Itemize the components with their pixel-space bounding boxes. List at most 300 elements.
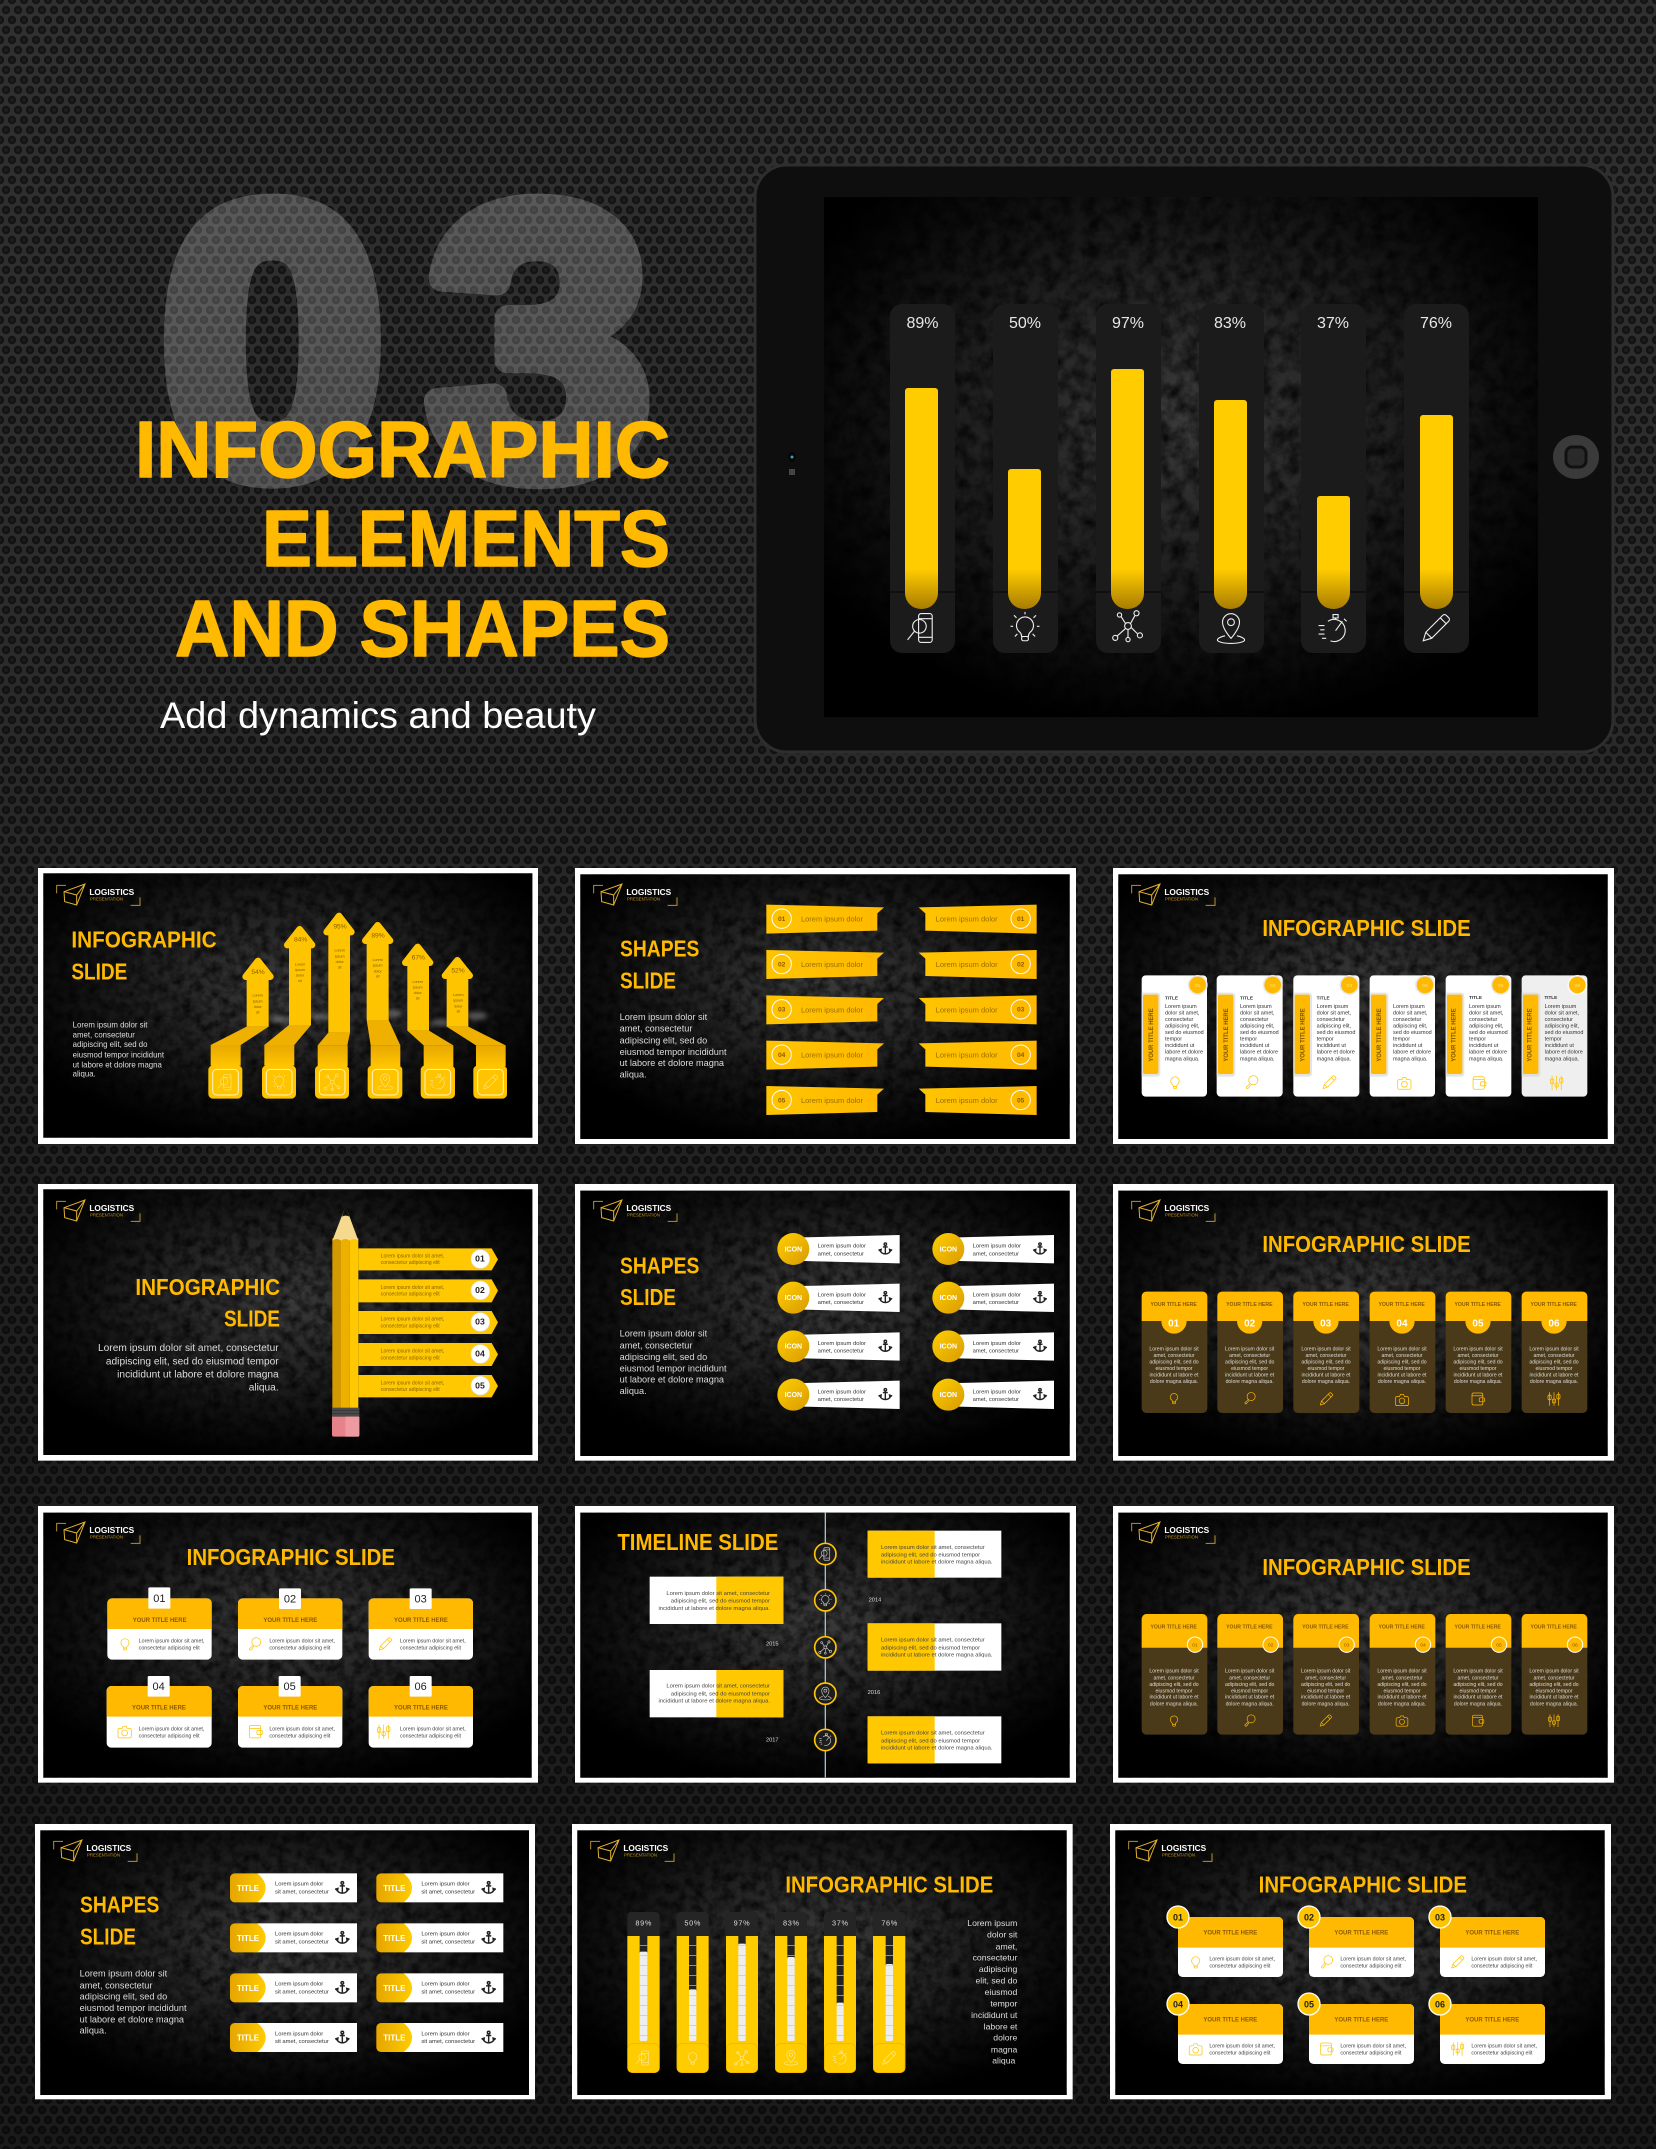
card 03: Lorem ipsum dolor sit	[1301, 1346, 1351, 1352]
arrow 67%: Lorem	[412, 980, 423, 984]
body text: adipiscing elit, sed do	[73, 1040, 148, 1049]
card 03: 03	[415, 1593, 427, 1605]
card 04: incididunt ut labore et	[1377, 1372, 1427, 1378]
bar column 83%: 83%	[1214, 315, 1246, 332]
card 02: adipiscing elit, sed do	[1225, 1360, 1274, 1366]
box left 2: incididunt ut labore et dolore magna aliqua.	[659, 1699, 770, 1705]
card 04	[1370, 1614, 1435, 1735]
card 03: adipiscing elit, sed do	[1301, 1682, 1350, 1688]
card 03: dolor sit amet,	[1317, 1011, 1352, 1017]
body text: elit, sed do	[975, 1975, 1018, 1985]
banner 02: Lorem ipsum dolor sit amet,	[381, 1285, 444, 1291]
arrow 67%: 67%	[412, 954, 425, 961]
bar column 89%: 89%	[906, 315, 939, 332]
card 03: labore et dolore	[1317, 1050, 1355, 1056]
left item 3: amet, consectetur	[818, 1349, 864, 1355]
right ribbon 01: 01	[1017, 916, 1025, 923]
card 01: magna aliqua.	[1165, 1056, 1200, 1062]
heading: SHAPES	[620, 1252, 699, 1278]
timeline axis	[823, 1513, 827, 1777]
left item 1	[230, 1873, 357, 1902]
arrow 52%	[445, 960, 507, 1099]
left item 1	[777, 1233, 900, 1265]
body text: eiusmod tempor incididunt	[73, 1050, 165, 1059]
card 05: 05	[1498, 983, 1504, 989]
card 05	[1298, 1993, 1414, 2064]
arrow 89%: ipsum	[373, 964, 383, 968]
thermometer 89%: 89%	[635, 1918, 652, 1927]
card 03: 03	[1347, 983, 1352, 989]
thermometer 50%	[677, 1912, 709, 2073]
card 06: eiusmod tempor	[1536, 1688, 1573, 1694]
bar column 76%	[1404, 304, 1469, 653]
left item 3: Lorem ipsum dolor	[818, 1341, 866, 1347]
years: 2014	[869, 1598, 881, 1604]
slide 11: thermometer bars	[572, 1824, 1073, 2099]
card 01: dolore magna aliqua.	[1150, 1379, 1198, 1385]
years: 2017	[766, 1738, 779, 1744]
card 02: YOUR TITLE HERE	[1334, 1930, 1388, 1936]
card 01	[1142, 975, 1208, 1097]
slide 5: icon balls	[575, 1184, 1076, 1461]
logo: LOGISTICS	[1161, 1843, 1207, 1853]
bar column 76%: 76%	[1420, 315, 1452, 332]
right item 2: Lorem ipsum dolor	[973, 1292, 1021, 1298]
left ribbon 04: 04	[778, 1052, 786, 1059]
slide 7: six number tab cards	[38, 1506, 538, 1783]
card 02: YOUR TITLE HERE	[1226, 1625, 1273, 1631]
left item 2: TITLE	[237, 1934, 260, 1943]
card 03: 03	[1344, 1643, 1350, 1649]
logo: PRESENTATION	[627, 897, 660, 902]
left ribbon 02: 02	[778, 961, 786, 968]
left item 1: sit amet, consectetur	[275, 1889, 329, 1895]
card 06: adipiscing elit, sed do	[1529, 1360, 1579, 1366]
card 04: adipiscing elit, sed do	[1377, 1682, 1427, 1688]
card 06: TITLE	[1544, 995, 1557, 1000]
heading	[80, 1892, 159, 1949]
left item 4	[777, 1379, 900, 1411]
card 03: YOUR TITLE HERE	[394, 1618, 448, 1624]
card 02: eiusmod tempor	[1231, 1688, 1268, 1694]
tablet camera	[788, 452, 796, 475]
card 04: dolor sit amet,	[1393, 1011, 1428, 1017]
card 01: 01	[1195, 983, 1201, 989]
card 04	[107, 1676, 212, 1748]
card 02: incididunt ut labore et	[1225, 1695, 1275, 1701]
card 04: YOUR TITLE HERE	[132, 1706, 186, 1712]
banner 04	[358, 1343, 498, 1366]
node 3	[815, 1637, 836, 1658]
thermometer 83%: 83%	[783, 1918, 800, 1927]
card 03: dolore magna aliqua.	[1302, 1379, 1350, 1385]
logo	[57, 884, 140, 905]
banner 05	[358, 1375, 498, 1397]
card 06: YOUR TITLE HERE	[1530, 1302, 1577, 1308]
body text: ut labore et dolore magna	[80, 2014, 185, 2024]
card 02	[1298, 1906, 1414, 1977]
box left 1: incididunt ut labore et dolore magna aliqua.	[659, 1606, 770, 1612]
arrow 95%: ipsum	[335, 954, 345, 958]
logo	[57, 1522, 140, 1543]
left ribbon 04	[766, 1041, 884, 1070]
card 01: sed do eiusmod	[1165, 1030, 1204, 1036]
body text: magna	[991, 2045, 1018, 2055]
card 05: 05	[1472, 1319, 1484, 1330]
card 05: incididunt ut labore et	[1453, 1695, 1503, 1701]
card 05: Lorem ipsum dolor sit amet,	[1340, 2044, 1406, 2050]
body text: incididunt ut labore et dolore magna	[117, 1369, 279, 1380]
card 02: YOUR TITLE HERE	[1223, 1008, 1230, 1062]
right item 4: Lorem ipsum dolor	[973, 1389, 1021, 1395]
card 02: incididunt ut labore et	[1225, 1372, 1275, 1378]
banner 01: consectetur adipiscing elit	[381, 1260, 440, 1266]
logo: PRESENTATION	[1165, 1535, 1198, 1540]
arrow 54%: dolor	[254, 1005, 263, 1009]
card 04: magna aliqua.	[1393, 1056, 1428, 1062]
box left 2: adipiscing elit, sed do eiusmod tempor	[671, 1691, 770, 1697]
years	[766, 1598, 881, 1744]
arrow 84%: sit	[298, 979, 302, 983]
card 03	[1293, 1614, 1359, 1735]
arrow 84%: ipsum	[295, 968, 305, 972]
card 06: dolor sit amet,	[1545, 1011, 1580, 1017]
heading: INFOGRAPHIC SLIDE	[1259, 1872, 1467, 1898]
card 05: adipiscing elit, sed do	[1453, 1360, 1503, 1366]
card 05: amet, consectetur	[1458, 1675, 1499, 1681]
card 01: 01	[153, 1593, 165, 1605]
card 04: sed do eiusmod	[1393, 1030, 1432, 1036]
card 04: dolore magna aliqua.	[1378, 1379, 1426, 1385]
left ribbon 01	[766, 905, 884, 934]
card 02: dolor sit amet,	[1240, 1011, 1275, 1017]
bar column 97%: 97%	[1112, 315, 1144, 332]
left item 3: ICON	[785, 1344, 802, 1351]
card 02: amet, consectetur	[1229, 1353, 1270, 1359]
thermometer 50%: 50%	[684, 1918, 701, 1927]
card 05: YOUR TITLE HERE	[1454, 1302, 1501, 1308]
card 04: YOUR TITLE HERE	[1203, 2017, 1257, 2023]
slide 1: arrows infographic	[38, 868, 538, 1144]
card 04: consectetur adipiscing elit	[139, 1733, 200, 1739]
card 03: Lorem ipsum dolor sit amet,	[1471, 1957, 1537, 1963]
right item 1	[376, 1873, 503, 1902]
banner 04: consectetur adipiscing elit	[381, 1355, 440, 1361]
card 01: Lorem ipsum dolor sit	[1149, 1669, 1199, 1675]
logo: PRESENTATION	[1162, 1853, 1195, 1858]
right ribbon 05: 05	[1017, 1097, 1025, 1104]
card 06: Lorem ipsum	[1545, 1004, 1576, 1010]
body text: aliqua.	[620, 1069, 647, 1079]
card 05: YOUR TITLE HERE	[263, 1706, 317, 1712]
heading: SLIDE	[80, 1923, 136, 1949]
heading: INFOGRAPHIC SLIDE	[1262, 1231, 1471, 1257]
card 05: 05	[284, 1681, 296, 1693]
right item 1: TITLE	[383, 1884, 406, 1893]
card 02: Lorem ipsum	[1240, 1004, 1272, 1010]
card 01: adipiscing elit,	[1165, 1024, 1200, 1030]
card 05: Lorem ipsum	[1469, 1004, 1501, 1010]
logo: LOGISTICS	[89, 1525, 135, 1535]
card 03: incididunt ut labore et	[1301, 1695, 1351, 1701]
card 06: adipiscing elit, sed do	[1529, 1682, 1579, 1688]
main title	[135, 405, 670, 673]
logo: LOGISTICS	[86, 1843, 132, 1853]
card 05	[1446, 1292, 1511, 1413]
slide 2: ribbon shapes	[575, 868, 1076, 1144]
right item 3: sit amet, consectetur	[421, 1989, 475, 1995]
right item 1: ICON	[940, 1246, 957, 1253]
arrow 89%	[365, 925, 402, 1099]
left item 1: TITLE	[237, 1884, 260, 1893]
card 06: magna aliqua.	[1545, 1056, 1580, 1062]
slide 6: brown cards with centered numbers	[1113, 1184, 1614, 1461]
card 02: consectetur	[1240, 1017, 1269, 1023]
card 04: amet, consectetur	[1382, 1353, 1423, 1359]
card 04: eiusmod tempor	[1384, 1688, 1421, 1694]
card 06: dolore magna aliqua.	[1530, 1379, 1578, 1385]
right ribbon 03	[919, 995, 1037, 1024]
card 01: consectetur adipiscing elit	[139, 1645, 200, 1651]
card 06: incididunt ut	[1545, 1043, 1574, 1049]
box left 1	[650, 1577, 783, 1624]
arrow 95%: Lorem	[334, 949, 345, 953]
right item 3	[376, 1973, 503, 2002]
card 03: incididunt ut labore et	[1301, 1372, 1351, 1378]
arrow 95%	[315, 916, 351, 1099]
left item 2	[777, 1282, 900, 1314]
card 04: incididunt ut	[1393, 1043, 1423, 1049]
card 05: adipiscing elit,	[1469, 1024, 1504, 1030]
bar column 83%	[1199, 304, 1264, 653]
card 05	[238, 1676, 342, 1748]
card 02: YOUR TITLE HERE	[1226, 1302, 1273, 1308]
left item 2: sit amet, consectetur	[275, 1939, 329, 1945]
card 01: adipiscing elit, sed do	[1149, 1682, 1199, 1688]
left item 2: amet, consectetur	[818, 1300, 864, 1306]
banner 01: Lorem ipsum dolor sit amet,	[381, 1253, 444, 1259]
card 03: Lorem ipsum	[1317, 1004, 1348, 1010]
banner 04: 04	[475, 1349, 485, 1359]
body text: eiusmod tempor incididunt	[620, 1047, 727, 1057]
heading	[620, 1252, 699, 1310]
card 05: eiusmod tempor	[1460, 1366, 1497, 1372]
arrow 67%: ipsum	[413, 985, 423, 989]
card 05: sed do eiusmod	[1469, 1030, 1508, 1036]
card 04: consectetur	[1393, 1017, 1422, 1023]
card 01: amet, consectetur	[1154, 1675, 1195, 1681]
card 03: consectetur adipiscing elit	[1471, 1963, 1533, 1969]
body text: incididunt ut	[971, 2010, 1018, 2020]
logo: LOGISTICS	[1164, 1525, 1210, 1535]
banner 03: Lorem ipsum dolor sit amet,	[381, 1317, 444, 1323]
card 04: amet, consectetur	[1382, 1675, 1423, 1681]
tablet home button	[1553, 435, 1599, 479]
body text: ut labore et dolore magna	[620, 1375, 725, 1385]
right item 4	[376, 2023, 503, 2052]
card 06: Lorem ipsum dolor sit amet,	[400, 1727, 466, 1733]
card 05: amet, consectetur	[1458, 1353, 1499, 1359]
card 02	[1217, 1614, 1283, 1735]
card 04: adipiscing elit, sed do	[1377, 1360, 1427, 1366]
right item 2	[932, 1282, 1054, 1314]
right ribbon 01	[919, 905, 1037, 934]
card 05: dolor sit amet,	[1469, 1011, 1504, 1017]
card 04: Lorem ipsum dolor sit amet,	[139, 1727, 204, 1733]
node 4	[815, 1683, 836, 1704]
card 05	[1446, 1614, 1511, 1735]
logo: PRESENTATION	[90, 1535, 123, 1540]
slide 3: white vertical cards	[1113, 868, 1614, 1144]
heading: INFOGRAPHIC SLIDE	[187, 1544, 395, 1570]
right item 1: Lorem ipsum dolor	[973, 1244, 1021, 1250]
card 01: consectetur	[1165, 1017, 1194, 1023]
card 03: 03	[1435, 1912, 1445, 1922]
arrow 54%: sit	[256, 1010, 259, 1014]
box right 3: Lorem ipsum dolor sit amet, consectetur	[881, 1731, 985, 1737]
card 05: Lorem ipsum dolor sit	[1453, 1669, 1503, 1675]
body text: tempor	[990, 1998, 1017, 2008]
banner 03: consectetur adipiscing elit	[381, 1323, 440, 1329]
card 04: adipiscing elit,	[1393, 1024, 1428, 1030]
card 02: 02	[1304, 1912, 1314, 1922]
logo: PRESENTATION	[1165, 897, 1198, 902]
card 04: Lorem ipsum dolor sit amet,	[1209, 2044, 1275, 2050]
card 03: adipiscing elit, sed do	[1301, 1360, 1351, 1366]
card 06: 06	[1572, 1643, 1578, 1649]
body text: amet, consectetur	[73, 1030, 135, 1039]
bar column 89%	[890, 304, 955, 653]
heading: INFOGRAPHIC SLIDE	[1262, 1554, 1471, 1580]
logo: LOGISTICS	[89, 887, 135, 897]
thermometer 83%	[775, 1912, 807, 2073]
right ribbon 04	[919, 1041, 1037, 1070]
right ribbon 01: Lorem ipsum dolor	[936, 915, 998, 924]
card 02: eiusmod tempor	[1231, 1366, 1268, 1372]
heading: INFOGRAPHIC SLIDE	[1262, 915, 1471, 941]
logo: PRESENTATION	[1165, 1213, 1198, 1218]
card 06	[369, 1676, 473, 1748]
right item 1	[932, 1233, 1054, 1265]
body text: eiusmod tempor incididunt	[80, 2003, 187, 2013]
card 06: 06	[1548, 1319, 1560, 1330]
body text: dolore	[993, 2033, 1017, 2043]
right item 3: Lorem ipsum dolor	[973, 1341, 1021, 1347]
body text: aliqua.	[80, 2026, 107, 2036]
card 02: YOUR TITLE HERE	[263, 1618, 317, 1624]
box right 2	[868, 1623, 1001, 1671]
card 05: eiusmod tempor	[1460, 1688, 1497, 1694]
logo: PRESENTATION	[90, 1213, 123, 1218]
logo: LOGISTICS	[1164, 1203, 1210, 1213]
left item 1: amet, consectetur	[818, 1251, 864, 1257]
right item 2: sit amet, consectetur	[421, 1939, 475, 1945]
card 06: incididunt ut labore et	[1529, 1695, 1579, 1701]
body text: amet, consectetur	[620, 1340, 692, 1350]
left ribbon 05	[766, 1086, 884, 1115]
heading	[620, 936, 699, 993]
body text: consectetur	[973, 1953, 1017, 1963]
card 03: dolore magna aliqua.	[1302, 1701, 1350, 1707]
card 02: Lorem ipsum dolor sit	[1225, 1669, 1274, 1675]
body text: eiusmod	[985, 1987, 1017, 1997]
body text: dolor sit	[987, 1930, 1018, 1940]
right ribbon 05	[919, 1086, 1037, 1115]
card 01: Lorem ipsum dolor sit	[1149, 1346, 1199, 1352]
banner 02: 02	[475, 1285, 485, 1295]
left item 2: ICON	[785, 1295, 802, 1302]
arrow 89%: sit	[376, 974, 379, 978]
body text: amet, consectetur	[80, 1980, 152, 1990]
left item 4: TITLE	[237, 2034, 260, 2043]
card 04: 04	[1173, 1999, 1183, 2009]
card 04: 04	[153, 1681, 165, 1693]
card 01: dolore magna aliqua.	[1150, 1701, 1198, 1707]
banner 03: 03	[475, 1317, 485, 1327]
body text: ut labore et dolore magna	[73, 1060, 163, 1069]
right ribbon 03: 03	[1017, 1007, 1025, 1014]
card 04: incididunt ut labore et	[1377, 1695, 1427, 1701]
card 01: YOUR TITLE HERE	[1148, 1008, 1155, 1062]
right item 3: ICON	[940, 1344, 957, 1351]
right item 2: ICON	[940, 1295, 957, 1302]
card 01: incididunt ut	[1165, 1043, 1195, 1049]
card 04: 04	[1420, 1643, 1426, 1649]
card 05: 05	[1496, 1643, 1502, 1649]
left item 1: ICON	[785, 1246, 802, 1253]
thermometer 97%	[726, 1912, 758, 2073]
card 03: consectetur adipiscing elit	[400, 1645, 462, 1651]
card 02: dolore magna aliqua.	[1226, 1701, 1274, 1707]
banner 02	[358, 1279, 498, 1302]
card 02: consectetur adipiscing elit	[1340, 1963, 1402, 1969]
box right 1: Lorem ipsum dolor sit amet, consectetur	[881, 1545, 985, 1551]
card 06: eiusmod tempor	[1536, 1366, 1573, 1372]
card 04: 04	[1396, 1319, 1408, 1330]
arrow 67%	[405, 947, 455, 1099]
card 04: labore et dolore	[1393, 1050, 1431, 1056]
card 06: tempor	[1545, 1037, 1562, 1043]
card 01: tempor	[1165, 1037, 1182, 1043]
right item 4: sit amet, consectetur	[421, 2039, 475, 2045]
body text: Lorem ipsum dolor sit	[80, 1968, 167, 1978]
heading: INFOGRAPHIC	[135, 1274, 280, 1300]
body text: amet,	[996, 1941, 1017, 1951]
heading: SLIDE	[620, 967, 676, 993]
card 03	[1429, 1906, 1545, 1977]
card 03: magna aliqua.	[1317, 1056, 1352, 1062]
card 06: Lorem ipsum dolor sit amet,	[1471, 2044, 1537, 2050]
left item 4: Lorem ipsum dolor	[275, 2031, 323, 2037]
left item 4: sit amet, consectetur	[275, 2039, 329, 2045]
card 02	[1217, 1292, 1283, 1413]
card 03: amet, consectetur	[1305, 1675, 1346, 1681]
box right 1	[868, 1531, 1001, 1578]
right ribbon 02: Lorem ipsum dolor	[936, 960, 998, 969]
right item 2: amet, consectetur	[973, 1300, 1019, 1306]
card 06: consectetur	[1545, 1017, 1573, 1023]
arrow 54%: Lorem	[252, 994, 263, 998]
heading: SLIDE	[71, 958, 127, 984]
card 01	[1142, 1614, 1207, 1735]
box left 1: Lorem ipsum dolor sit amet, consectetur	[666, 1591, 770, 1597]
left item 1: Lorem ipsum dolor	[275, 1882, 323, 1888]
card 03: amet, consectetur	[1306, 1353, 1347, 1359]
arrow 84%	[262, 929, 312, 1099]
card 03	[369, 1588, 473, 1660]
arrow 52%: dolor	[454, 1004, 463, 1008]
left item 4: Lorem ipsum dolor	[818, 1389, 866, 1395]
